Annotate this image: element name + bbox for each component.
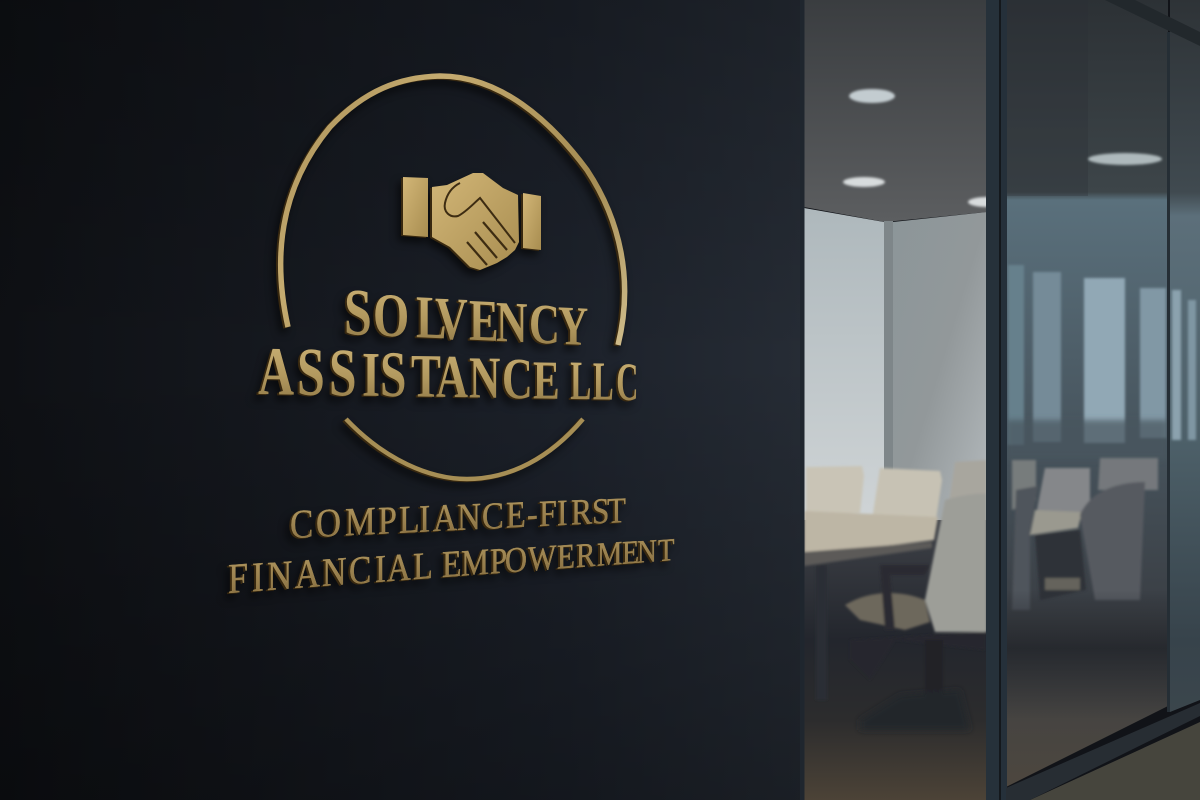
tagline line 1 — [290, 487, 626, 548]
tagline line 2 — [228, 522, 674, 603]
left room wall — [804, 208, 884, 520]
lower ring arc — [346, 419, 583, 479]
company name line 1: Y — [558, 294, 588, 358]
darker reflected column — [1007, 193, 1088, 196]
tagline line 2: N — [322, 550, 347, 596]
floor — [804, 640, 987, 800]
tagline line 2: L — [413, 543, 440, 588]
tagline line 2: P — [490, 541, 507, 582]
reflected chairs and table — [1012, 458, 1158, 610]
company name line 2: S — [329, 334, 357, 410]
tagline line 2: W — [528, 539, 556, 579]
company name line 2: A — [436, 342, 468, 411]
tagline line 2: O — [505, 540, 527, 581]
tagline line 2: E — [442, 542, 462, 586]
tagline line 2: I — [252, 554, 264, 601]
tagline line 1: S — [592, 492, 609, 532]
company name line 1: O — [373, 280, 409, 350]
tagline line 1: I — [419, 497, 430, 540]
ceiling lights — [843, 89, 1004, 207]
company name line 2: N — [469, 346, 500, 412]
panel: meeting room behind first glass pane — [804, 0, 1004, 800]
tagline line 1: I — [557, 493, 568, 534]
company name line 2 — [258, 333, 560, 415]
tagline line 2: E — [557, 536, 575, 576]
top rail — [1105, 0, 1200, 46]
tagline line 1: F — [539, 493, 557, 535]
panel: second glass pane with reflections — [1006, 0, 1168, 800]
tagline line 2: C — [349, 547, 371, 593]
glass frames — [800, 0, 1200, 800]
company name line 1: L — [416, 283, 447, 352]
company name line 2: S — [380, 339, 406, 411]
tagline line 1: A — [433, 496, 457, 540]
tagline line 2: R — [576, 536, 596, 575]
lower wall in shadow — [804, 520, 987, 640]
tagline line 2: M — [461, 541, 489, 584]
reflected ceiling light — [1088, 153, 1162, 165]
tagline line 1: E — [506, 494, 526, 536]
company name line 1: E — [469, 288, 499, 355]
company name line 1: N — [496, 290, 527, 356]
main mullion — [986, 0, 1000, 800]
tagline line 2: A — [295, 551, 320, 598]
tagline line 1: P — [378, 498, 397, 542]
company name line 2: C — [502, 346, 533, 412]
company name line 2: LLC: L — [570, 350, 591, 412]
company name line 2: E — [533, 350, 560, 411]
bottom rail — [1006, 703, 1200, 800]
tagline line 2: A — [387, 545, 411, 590]
tagline line 2: E — [622, 533, 639, 571]
company name line 2: S — [297, 334, 325, 411]
company name line 1: C — [529, 292, 560, 356]
tagline line 1: N — [457, 495, 481, 539]
tagline line 2: T — [658, 533, 674, 569]
tagline line 1: R — [571, 491, 592, 533]
tagline line 1: - — [527, 493, 538, 535]
room corner column — [884, 221, 893, 470]
logo signage — [228, 76, 674, 603]
reflected windows — [1008, 265, 1166, 445]
company name line 2: LLC — [570, 350, 638, 412]
tagline line 2: F — [228, 554, 248, 603]
tagline line 1: M — [345, 500, 376, 545]
table and chairs — [804, 460, 987, 730]
reflected dark floor haze — [1007, 602, 1167, 700]
tagline line 2: M — [597, 534, 622, 573]
company name line 1 — [344, 275, 588, 360]
icon: handshake — [403, 173, 541, 270]
upper ring arc — [281, 76, 625, 345]
carpet floor — [1030, 722, 1200, 800]
thin divider — [1167, 32, 1170, 712]
tagline line 1: C — [482, 494, 504, 537]
tagline line 1: T — [607, 491, 626, 531]
tagline line 1: O — [316, 501, 341, 546]
tagline line 2: I — [375, 547, 386, 591]
tagline line 2: N — [637, 532, 657, 570]
right room wall — [893, 212, 987, 520]
panel: third glass pane — [1170, 0, 1200, 712]
tagline line 1: C — [290, 502, 313, 548]
horizon band — [1008, 417, 1167, 446]
company name line 1: V — [435, 284, 468, 353]
panel: dark navy wall — [0, 0, 805, 800]
company name line 2: A — [258, 333, 294, 411]
wall edge — [800, 0, 804, 800]
tagline line 2: N — [267, 553, 292, 600]
company name line 2: LLC: C — [616, 352, 638, 412]
company name line 2: T — [411, 342, 441, 411]
company name line 1: S — [344, 275, 372, 350]
company name line 2: LLC: L — [593, 350, 614, 412]
tagline line 1: L — [399, 496, 420, 541]
ceiling — [804, 0, 987, 222]
company name line 2: I — [362, 340, 380, 411]
